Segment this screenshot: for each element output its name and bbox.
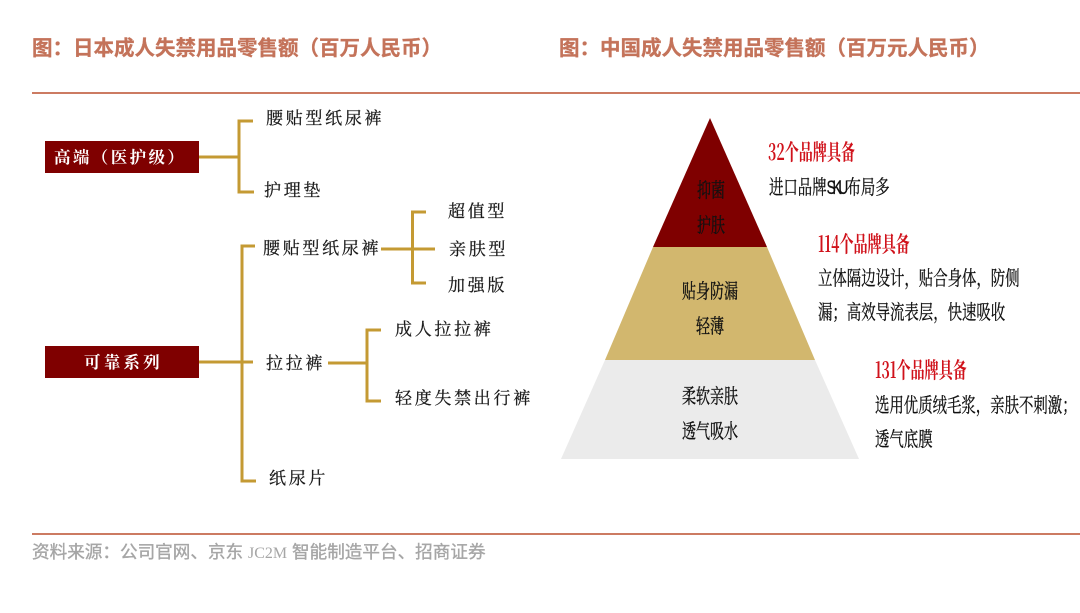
pyramid tier: top	[653, 118, 767, 247]
label: pads: 纸尿片	[269, 464, 328, 489]
callout body: bottom tier	[875, 389, 1077, 452]
box: reliable series	[45, 346, 199, 378]
pyramid text: bottom: 柔软亲肤	[682, 380, 738, 409]
pyramid text: top: 护肤	[697, 209, 725, 238]
pyramid tier: bottom	[561, 360, 859, 459]
callout body: bottom tier: 选用优质绒毛浆，亲肤不刺激；	[875, 389, 1077, 418]
pyramid text: top	[697, 174, 725, 238]
pyramid text: middle	[682, 275, 738, 339]
label: skin-friendly type: 亲肤型	[449, 235, 508, 260]
bracket: pull-up pants types	[328, 330, 381, 401]
pyramid text: bottom: 透气吸水	[682, 415, 738, 444]
label: adult pull-up pants: 成人拉拉裤	[395, 315, 494, 340]
label: waist-tape diaper (reliable): 腰贴型纸尿裤	[263, 234, 381, 259]
bracket: premium tier	[199, 121, 254, 192]
callout heading: 32 brands: 32个品牌具备	[768, 136, 855, 167]
pyramid text: top: 抑菌	[697, 174, 725, 203]
callout body: middle tier: 立体隔边设计，贴合身体，防侧	[818, 262, 1020, 291]
pyramid text: middle: 轻薄	[696, 310, 724, 339]
callout heading: 131 brands: 131个品牌具备	[875, 354, 967, 385]
callout body: top tier: 进口品牌SKU布局多	[769, 171, 890, 200]
source note: 资料来源：公司官网、京东 JC2M 智能制造平台、招商证券	[32, 542, 486, 562]
box: premium	[45, 141, 199, 173]
label: pull-up pants: 拉拉裤	[266, 349, 325, 374]
pyramid text: middle: 贴身防漏	[682, 275, 738, 304]
pyramid text: bottom	[682, 380, 738, 444]
bottom divider	[32, 533, 1080, 535]
label: light incontinence pants: 轻度失禁出行裤	[395, 384, 533, 409]
label: reinforced type: 加强版	[448, 271, 507, 296]
box: reliable series: 可靠系列	[84, 349, 163, 373]
callout body: middle tier: 漏；高效导流表层，快速吸收	[818, 296, 1005, 324]
title: China: 图：中国成人失禁用品零售额（百万元人民币）	[559, 37, 990, 60]
title: Japan: 图：日本成人失禁用品零售额（百万人民币）	[32, 37, 442, 60]
callout heading: 114 brands: 114个品牌具备	[818, 228, 910, 259]
label: care pad: 护理垫	[264, 176, 323, 201]
callout body: bottom tier: 透气底膜	[875, 422, 933, 452]
callout body: middle tier	[818, 262, 1020, 324]
top divider	[32, 92, 1080, 94]
bracket: waist-tape diaper types	[381, 212, 435, 283]
pyramid tier: middle	[605, 247, 815, 360]
label: waist-tape diaper (premium): 腰贴型纸尿裤	[266, 104, 384, 129]
label: value type: 超值型	[448, 197, 507, 222]
bracket: reliable series	[199, 246, 256, 481]
box: premium: 高端（医护级）	[54, 144, 186, 168]
